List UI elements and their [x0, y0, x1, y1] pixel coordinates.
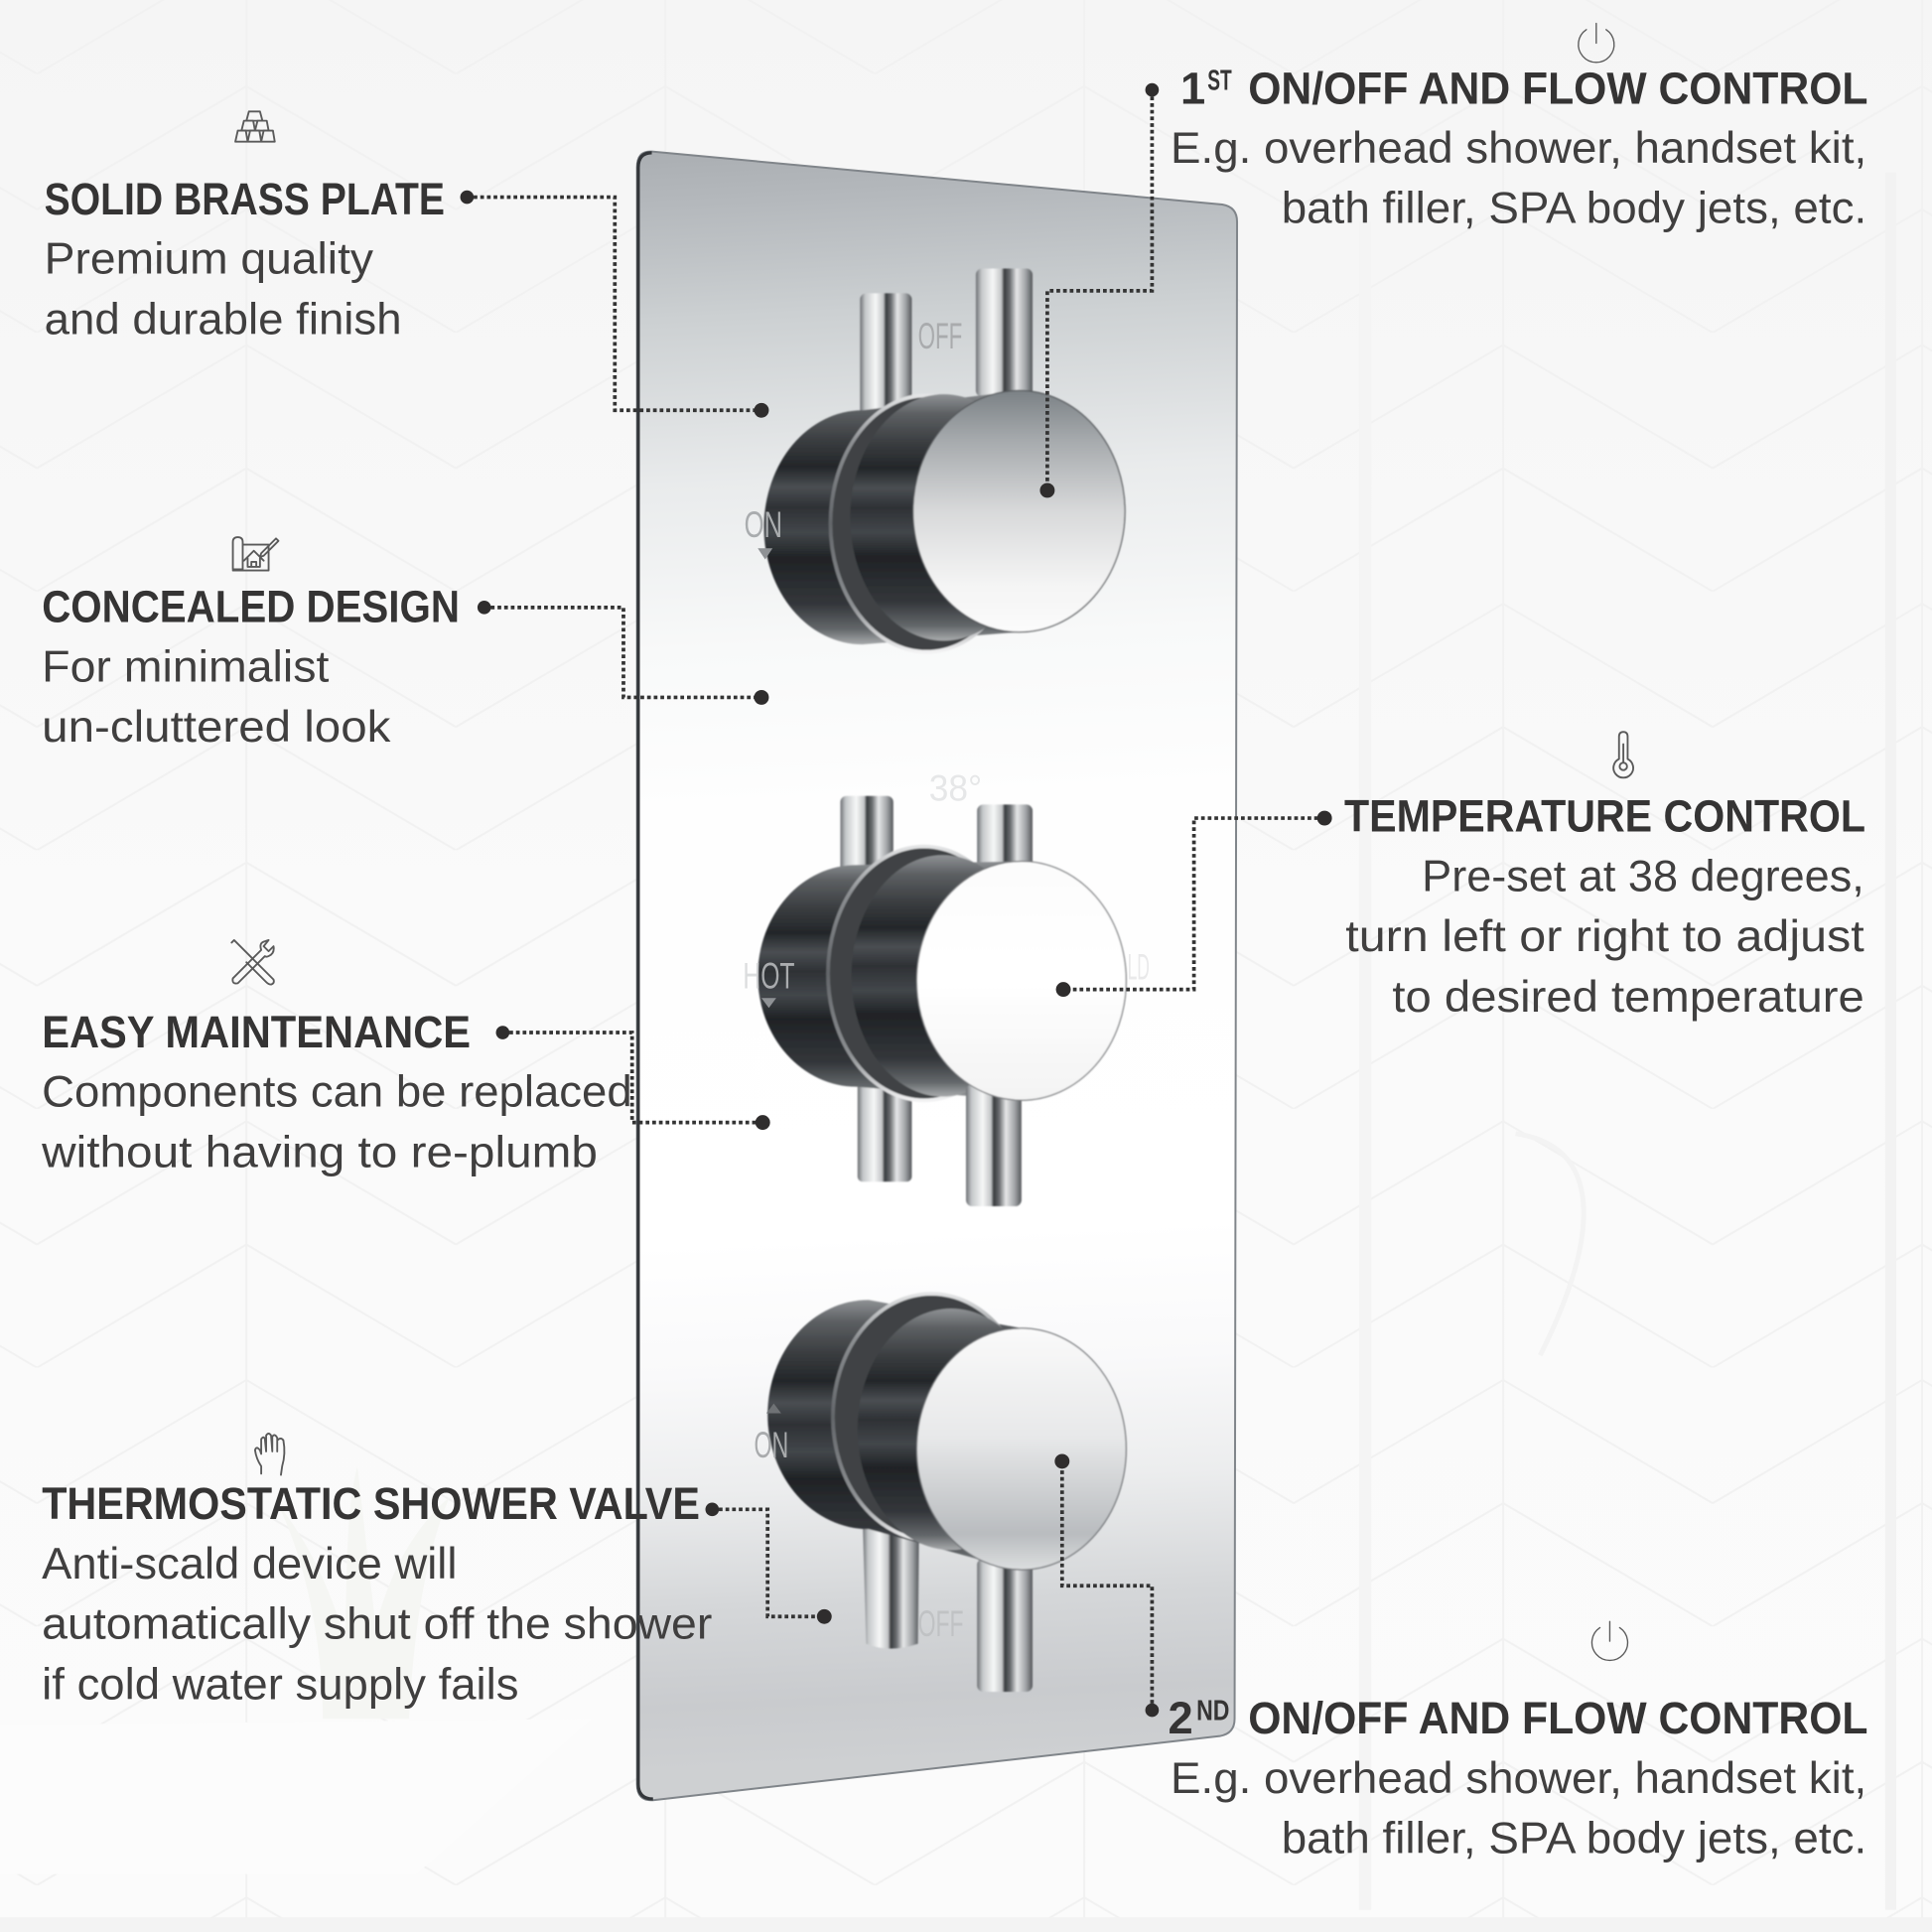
knob: temperature control — [758, 796, 1126, 1206]
icon: house blueprint — [233, 537, 278, 571]
icon: raised hand — [255, 1434, 284, 1475]
icon: crossed screwdriver and spanner — [231, 940, 274, 985]
text block: temperature control: Pre-set at 38 degrees, — [1422, 852, 1864, 900]
knob: second on/off and flow control — [767, 1294, 1126, 1692]
callout line: temperature control — [1056, 811, 1332, 997]
text block: second on/off and flow control: ND — [1196, 1696, 1236, 1727]
callout line: concealed design — [478, 601, 768, 705]
text block: second on/off and flow control: E.g. overhead shower, handset kit, — [1171, 1754, 1866, 1803]
text block: second on/off and flow control — [1169, 1693, 1867, 1863]
text block: easy maintenance: EASY MAINTENANCE — [42, 1007, 471, 1057]
panel: chrome valve plate — [637, 152, 1237, 1800]
plate markings: 38° — [929, 767, 982, 809]
icon: thermometer — [1613, 732, 1633, 777]
text block: easy maintenance: without having to re-plumb — [41, 1128, 598, 1176]
text block: thermostatic shower valve — [42, 1478, 712, 1709]
text block: solid brass plate — [45, 174, 445, 344]
plate markings: OFF — [918, 1602, 964, 1644]
text block: concealed design: CONCEALED DESIGN — [42, 582, 460, 632]
text block: temperature control — [1344, 791, 1865, 1022]
knob: first on/off and flow control — [763, 269, 1125, 652]
text block: first on/off and flow control: 1 — [1180, 63, 1205, 113]
text block: first on/off and flow control — [1171, 63, 1867, 233]
text block: first on/off and flow control: E.g. overhead shower, handset kit, — [1171, 124, 1866, 173]
text block: second on/off and flow control: ON/OFF AND FLOW CONTROL — [1248, 1693, 1867, 1743]
text block: thermostatic shower valve: automatically shut off the shower — [42, 1600, 712, 1649]
text block: easy maintenance — [41, 1007, 632, 1176]
text block: solid brass plate: Premium quality — [45, 235, 373, 284]
callout line: easy maintenance — [496, 1026, 770, 1130]
text block: thermostatic shower valve: Anti-scald device will — [42, 1540, 457, 1588]
icon: power symbol bottom — [1591, 1621, 1627, 1660]
callout line: second control — [1054, 1453, 1159, 1717]
plate markings: ON — [755, 1424, 788, 1465]
text block: temperature control: TEMPERATURE CONTROL — [1344, 791, 1865, 842]
text block: concealed design: For minimalist — [42, 642, 329, 691]
plate left edge — [638, 153, 653, 1799]
text block: concealed design: un-cluttered look — [42, 703, 391, 752]
text block: second on/off and flow control: 2 — [1169, 1693, 1193, 1743]
plate markings: OFF — [918, 315, 962, 356]
text block: thermostatic shower valve: THERMOSTATIC SHOWER VALVE — [42, 1478, 700, 1529]
text block: first on/off and flow control: ON/OFF AND FLOW CONTROL — [1248, 63, 1867, 113]
text block: thermostatic shower valve: if cold water supply fails — [42, 1660, 518, 1709]
text block: temperature control: turn left or right to adjust — [1345, 912, 1864, 961]
plate markings: ON — [745, 503, 782, 545]
text block: second on/off and flow control: bath filler, SPA body jets, etc. — [1282, 1815, 1866, 1863]
text block: easy maintenance: Components can be replaced — [42, 1067, 632, 1116]
plate markings: HOT — [743, 954, 794, 996]
callout line: thermostatic shower valve — [706, 1502, 832, 1624]
text block: temperature control: to desired temperature — [1392, 973, 1864, 1022]
text block: first on/off and flow control: bath filler, SPA body jets, etc. — [1282, 185, 1866, 233]
text: LD — [1128, 946, 1150, 988]
callout line: solid brass plate — [461, 191, 768, 418]
text block: solid brass plate: SOLID BRASS PLATE — [45, 174, 445, 224]
text block: first on/off and flow control: ST — [1207, 66, 1237, 97]
icon: gold bars — [235, 111, 275, 142]
text block: solid brass plate: and durable finish — [45, 295, 402, 344]
callout line: first control — [1039, 83, 1159, 497]
plate markings — [743, 315, 982, 1644]
icon: power symbol top — [1579, 24, 1614, 63]
text block: concealed design — [42, 582, 460, 752]
